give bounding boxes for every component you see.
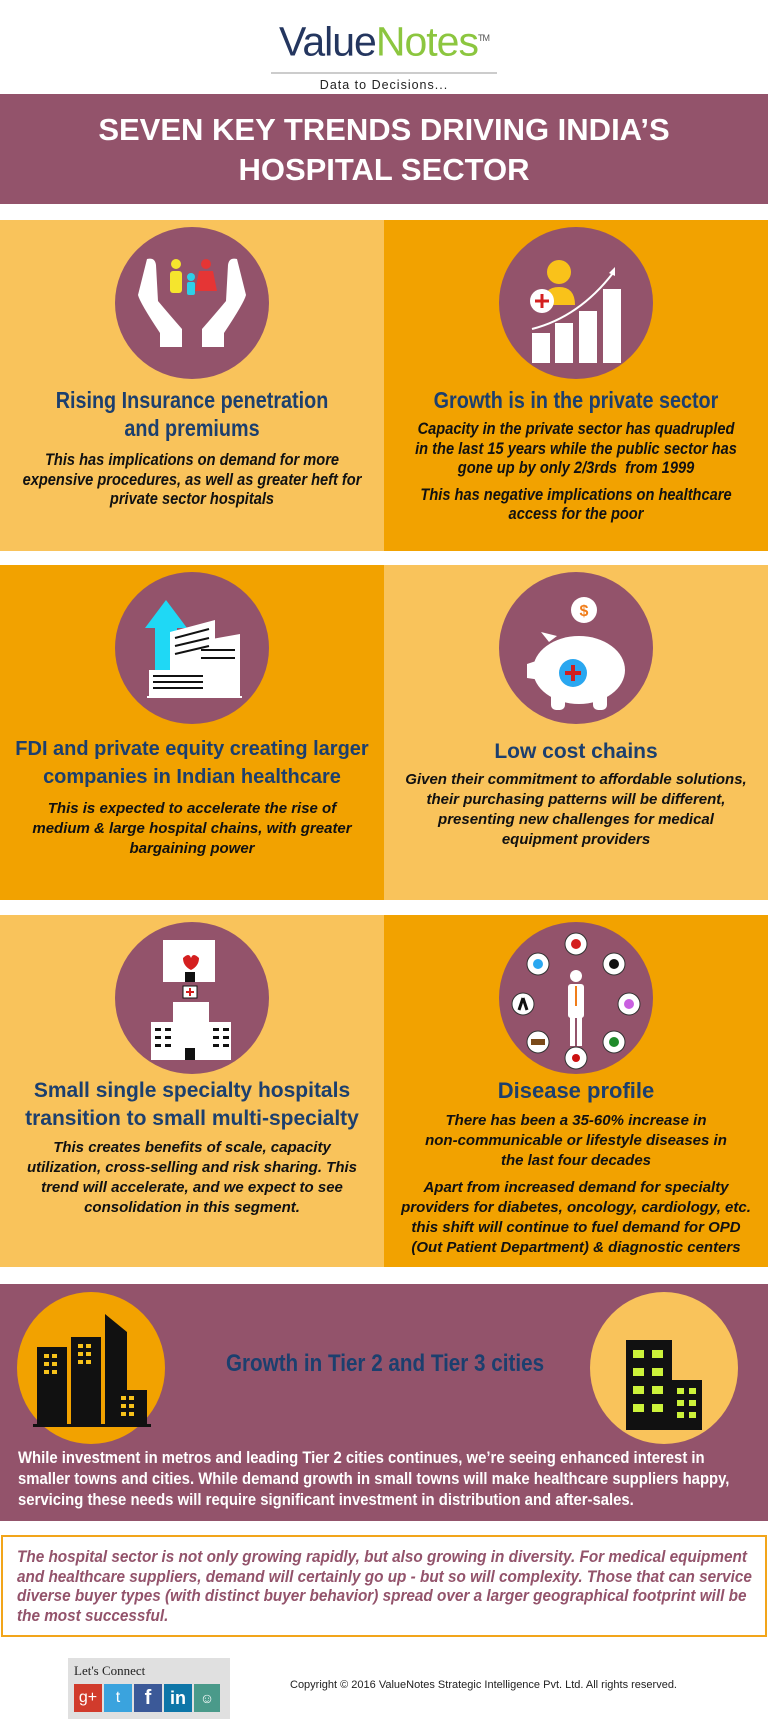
callout: conclusion: the most successful. xyxy=(17,1606,168,1624)
panel: small specialty hospitals xyxy=(0,915,384,1267)
body text: While investment in metros and leading Tier 2 cities continues, we’re seeing enhanced interest in xyxy=(18,1448,705,1467)
heading: FDI and private equity creating larger xyxy=(15,738,369,760)
social: lets connect: g+ xyxy=(79,1689,97,1706)
body text: in the last 15 years while the public sector has xyxy=(415,438,737,458)
panel: low cost chains xyxy=(384,565,768,900)
callout: conclusion: diverse buyer types (with distinct buyer behavior) spread over a larger geographical footprint will be xyxy=(17,1586,746,1605)
icon: growth chart xyxy=(499,227,653,379)
body text: utilization, cross-selling and risk sharing. This xyxy=(27,1159,357,1176)
body text: There has been a 35-60% increase in xyxy=(446,1112,706,1129)
icon: arrow and buildings xyxy=(115,572,269,724)
body text: access for the poor xyxy=(509,504,643,523)
panel: private sector growth xyxy=(384,220,768,551)
heading: Small single specialty hospitals xyxy=(34,1079,350,1102)
body text: the last four decades xyxy=(501,1152,651,1169)
body text: bargaining power xyxy=(129,840,254,857)
heading: Growth is in the private sector xyxy=(434,387,718,413)
icon: hospitals xyxy=(115,922,269,1074)
body text: This creates benefits of scale, capacity xyxy=(53,1139,331,1156)
heading: transition to small multi-specialty xyxy=(25,1107,359,1130)
icon: piggy bank xyxy=(499,572,653,724)
heading xyxy=(15,738,369,788)
title xyxy=(0,94,768,204)
heading xyxy=(25,1079,359,1130)
body text: This has implications on demand for more xyxy=(45,450,339,469)
panel: tier 2 and 3 cities xyxy=(0,1284,768,1521)
body text: smaller towns and cities. While demand growth in small towns will make healthcare suppliers happy, xyxy=(18,1469,729,1488)
body text xyxy=(400,1112,751,1256)
body text: This has negative implications on healthcare xyxy=(420,484,732,504)
body text: private sector hospitals xyxy=(110,489,274,508)
heading: and premiums xyxy=(124,415,260,441)
body text: equipment providers xyxy=(502,831,650,848)
body text: medium & large hospital chains, with greater xyxy=(32,820,352,837)
icon: disease ring xyxy=(499,922,653,1074)
body text xyxy=(405,771,747,848)
body text: Capacity in the private sector has quadrupled xyxy=(418,419,734,438)
body text xyxy=(18,1448,729,1509)
social: lets connect xyxy=(68,1658,230,1719)
icon: piggy bank: $ xyxy=(580,603,589,620)
logo: Data to Decisions... xyxy=(320,78,448,92)
social: lets connect: Let's Connect xyxy=(74,1663,145,1678)
body text: non-communicable or lifestyle diseases in xyxy=(425,1132,727,1149)
heading: Rising Insurance penetration xyxy=(56,387,328,413)
social: lets connect: t xyxy=(116,1689,120,1706)
body text: gone up by only 2/3rds from 1999 xyxy=(458,458,694,477)
body text: expensive procedures, as well as greater heft for xyxy=(23,470,361,488)
icon: hands with family xyxy=(115,227,269,379)
heading: companies in Indian healthcare xyxy=(43,766,341,788)
social: lets connect: in xyxy=(170,1688,186,1708)
callout: conclusion: and healthcare suppliers, demand will certainly go up - but so will complexity. Those that can service xyxy=(17,1566,752,1586)
body text: providers for diabetes, oncology, cardiology, etc. xyxy=(401,1199,751,1216)
heading xyxy=(56,387,328,441)
body text xyxy=(32,800,352,857)
copyright: Copyright © 2016 ValueNotes Strategic Intelligence Pvt. Ltd. All rights reserved. xyxy=(290,1679,677,1691)
body text: presenting new challenges for medical xyxy=(438,811,714,828)
heading: Low cost chains xyxy=(494,740,658,763)
heading: Disease profile xyxy=(498,1078,654,1103)
social: lets connect: f xyxy=(145,1687,151,1709)
body text: Given their commitment to affordable solutions, xyxy=(405,771,747,788)
body text: Apart from increased demand for specialty xyxy=(423,1179,729,1196)
body text: servicing these needs will require significant investment in distribution and after-sales. xyxy=(18,1490,634,1509)
body text xyxy=(27,1139,357,1216)
body text: This is expected to accelerate the rise of xyxy=(48,800,336,817)
panel: FDI xyxy=(0,565,384,900)
panel: disease profile xyxy=(384,915,768,1267)
body text xyxy=(23,450,362,508)
body text: consolidation in this segment. xyxy=(84,1199,300,1216)
social: lets connect: ☺ xyxy=(200,1690,214,1706)
body text: their purchasing patterns will be different, xyxy=(427,791,725,808)
icon: city light xyxy=(590,1292,738,1444)
callout: conclusion: The hospital sector is not only growing rapidly, but also growing in diversity. For medical equipment xyxy=(17,1547,747,1566)
icon: city dark xyxy=(17,1292,165,1444)
logo: ValueNotesTM xyxy=(279,19,489,65)
callout: conclusion xyxy=(1,1535,767,1637)
heading: Growth in Tier 2 and Tier 3 cities xyxy=(226,1350,544,1377)
body text: trend will accelerate, and we expect to see xyxy=(41,1179,343,1196)
body text: (Out Patient Department) & diagnostic centers xyxy=(411,1239,741,1256)
title: HOSPITAL SECTOR xyxy=(238,152,530,187)
body text: this shift will continue to fuel demand for OPD xyxy=(411,1219,741,1236)
body text xyxy=(415,419,737,523)
logo xyxy=(271,19,497,92)
title: SEVEN KEY TRENDS DRIVING INDIA’S xyxy=(98,112,670,147)
panel: rising insurance xyxy=(0,220,384,551)
